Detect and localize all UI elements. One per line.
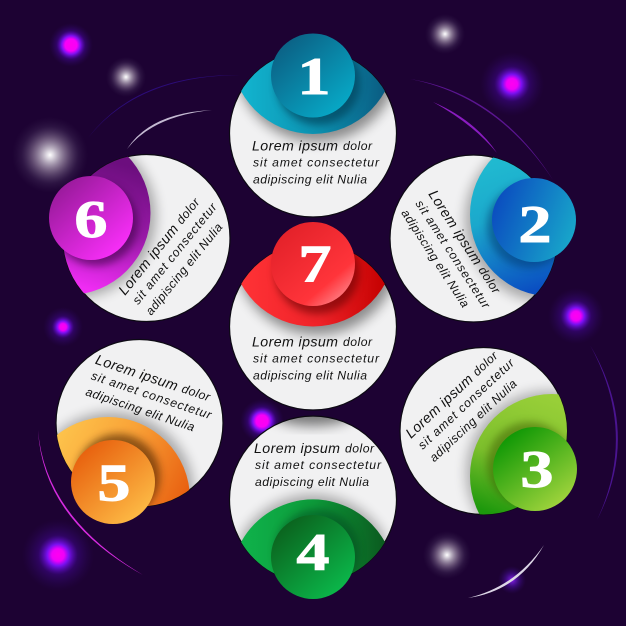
arc: top right magenta [433,102,497,153]
glow: magenta top left [49,23,93,67]
text 7: sit amet consectetur [253,352,380,366]
crescent shadow 1 [237,92,392,150]
text 5: dolor [180,382,213,404]
text 7: dolor [343,335,373,349]
glow: white top right [425,14,465,54]
glow: magenta center [240,399,284,443]
arc: right purple [590,345,618,520]
text 2 [398,187,508,321]
crescent 2 [470,158,556,295]
text 1: sit amet consectetur [253,156,380,170]
text 7: adipiscing elit Nulia [253,369,367,383]
crescent 6 [64,156,150,294]
text 1: Lorem ipsum [252,139,338,155]
crescent shadow 6 [85,156,163,302]
badge 5 [71,440,155,524]
text 5 [83,352,220,438]
badge 3 [493,427,577,511]
glow: magenta right [548,288,604,344]
glow: magenta top right [480,52,544,116]
text 3: dolor [470,348,501,379]
crescent shadow 7 [237,284,392,343]
text 4: dolor [345,442,375,456]
text 4 [254,441,382,489]
number 5: 5 [97,454,131,512]
text 6 [116,189,233,319]
panel 7 [229,222,397,411]
text 2: adipiscing elit Nulia [398,207,472,310]
text 5: Lorem ipsum [93,352,180,395]
crescent shadow 2 [458,157,534,305]
glow: white small top left [106,57,146,97]
text 7: Lorem ipsum [252,335,338,351]
number 3: 3 [520,440,554,498]
text 2: Lorem ipsum [425,187,485,268]
crescent 1 [241,60,385,134]
text 3: adipiscing elit Nulia [427,377,520,465]
crescent shadow 3 [460,384,558,514]
panel 5 [56,339,224,524]
crescent 3 [470,394,567,514]
glow: magenta mid left [43,307,83,347]
arc: top right purple [410,79,553,180]
arc: left magenta [38,430,143,575]
badge 7 [271,222,355,306]
number 2: 2 [518,195,552,253]
text 6: sit amet consectetur [130,200,220,307]
text 1: adipiscing elit Nulia [253,173,367,187]
badge 2 [492,178,576,262]
badge 4 [271,515,355,599]
top shadow from panel 7 [274,416,352,434]
text 2: sit amet consectetur [413,198,493,312]
text 7 [252,335,380,383]
panel 2 [390,154,576,323]
text 1 [252,139,380,187]
text 4: sit amet consectetur [255,458,382,472]
panel 6 [49,154,230,322]
crescent 4 [241,499,385,574]
crescent 7 [241,254,385,326]
glow: white bottom right [423,531,471,579]
arc: bottom right white [468,545,544,598]
number 6: 6 [74,190,108,248]
text 5: adipiscing elit Nulia [84,385,197,434]
text 6: adipiscing elit Nulia [143,220,225,318]
glow: violet on bottom arc [498,566,526,594]
text 4: adipiscing elit Nulia [255,475,369,489]
panel 3 [400,347,577,516]
text 3: sit amet consectetur [415,355,518,452]
text 4: Lorem ipsum [254,441,340,457]
text 5: sit amet consectetur [89,369,214,422]
panel 4 [230,398,396,599]
text 3: Lorem ipsum [403,371,477,442]
crescent shadow 4 [237,488,389,542]
text 6: Lorem ipsum [116,221,182,299]
glow: magenta bottom left [22,519,94,591]
text 6: dolor [173,195,203,227]
badge 6 [49,176,133,260]
arc: top left indigo [88,75,240,138]
number 1: 1 [297,47,331,105]
crescent shadow 5 [57,405,200,490]
panel 1 [229,34,397,218]
number 4: 4 [296,523,330,581]
glow: white large left [12,117,88,193]
text 2: dolor [475,264,504,297]
text 3 [403,343,529,465]
badge 1 [271,34,355,118]
number 7: 7 [298,235,332,293]
crescent 5 [57,417,190,506]
text 1: dolor [343,139,373,153]
arc: top left white [127,110,212,149]
